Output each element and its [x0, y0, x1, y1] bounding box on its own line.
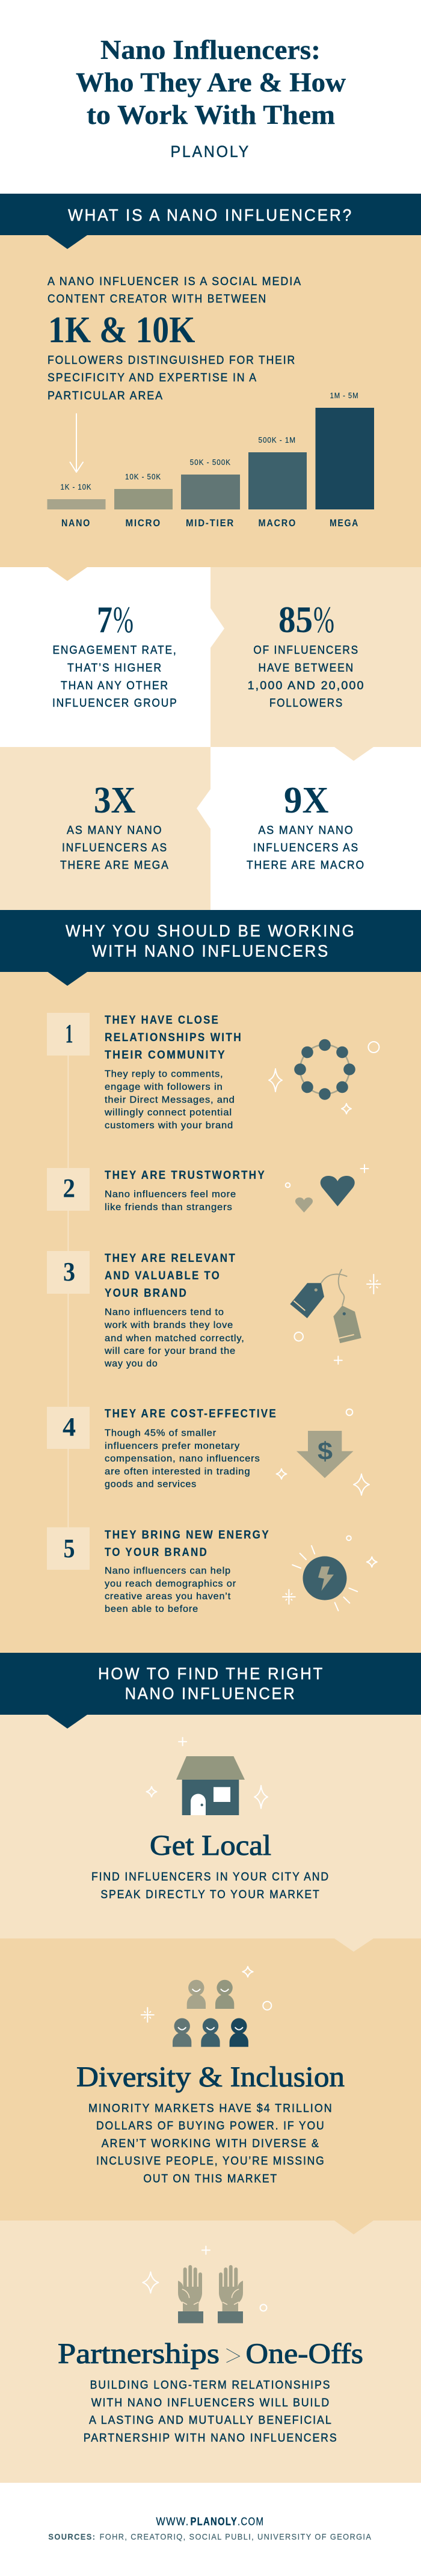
- pointer: tan notch into partnerships panel: [334, 2221, 373, 2234]
- bar chart: influencer tiers: NANO: [61, 517, 91, 529]
- item 3: relevant and valuable: will care for your brand the: [104, 1346, 236, 1356]
- stat: 7 percent: ENGAGEMENT RATE,: [53, 644, 177, 657]
- stat: 85 percent: [248, 600, 365, 710]
- stat: 9x: AS MANY NANO: [259, 824, 354, 837]
- stat: 85 percent: HAVE BETWEEN: [259, 662, 354, 674]
- get local text: [91, 1830, 330, 1901]
- stat: 7 percent: 7: [97, 600, 112, 641]
- bar chart: influencer tiers: 1M - 5M: [330, 392, 358, 400]
- diversity text: Diversity & Inclusion: [76, 2061, 345, 2093]
- stat: 7 percent: INFLUENCER GROUP: [52, 697, 178, 710]
- item 5: new energy: you reach demographics or: [105, 1579, 236, 1589]
- item 5: new energy: THEY BRING NEW ENERGY: [105, 1529, 270, 1542]
- title: Who They Are & How: [76, 67, 346, 97]
- item 5: new energy: Nano influencers can help: [105, 1566, 231, 1576]
- icon: community ring: [269, 1039, 379, 1114]
- definition text: 1K & 10K: [48, 310, 195, 351]
- item 1: close relationships: 1: [65, 1019, 73, 1048]
- item 5: new energy: [47, 1527, 270, 1614]
- icon: raised hands: [143, 2246, 267, 2323]
- bar chart: influencer tiers: 1K - 10K: [60, 483, 91, 491]
- arrow: pointing to nano bar: [70, 414, 83, 472]
- stat: 7 percent: [52, 600, 178, 710]
- brand name: PLANOLY: [171, 143, 250, 161]
- item 1: close relationships: customers with your brand: [105, 1120, 233, 1131]
- stat: 9x: [247, 780, 365, 872]
- icon: house: [147, 1738, 268, 1815]
- get local text: FIND INFLUENCERS IN YOUR CITY AND: [91, 1871, 330, 1884]
- item 3: relevant and valuable: [47, 1251, 245, 1369]
- item 4: cost-effective: 4: [63, 1412, 76, 1442]
- footer: website and sources: PLANOLY: [190, 2516, 238, 2528]
- partnerships text: BUILDING LONG-TERM RELATIONSHIPS: [90, 2379, 331, 2392]
- partnerships text: Partnerships: [58, 2338, 220, 2370]
- footer: website and sources: FOHR, CREATORIQ, SOCIAL PUBLI, UNIVERSITY OF GEORGIA: [100, 2531, 372, 2541]
- panel: 85 percent stat background: [210, 567, 421, 747]
- section banner: why you should be working: [0, 910, 421, 986]
- get local text: SPEAK DIRECTLY TO YOUR MARKET: [100, 1889, 321, 1901]
- item 1: close relationships: willingly connect potential: [104, 1108, 232, 1117]
- stat: 85 percent: 85: [278, 600, 313, 641]
- panel: 3x stat background: [0, 747, 210, 910]
- stat: 85 percent: OF INFLUENCERS: [253, 644, 359, 657]
- section banner: how to find: HOW TO FIND THE RIGHT: [98, 1664, 324, 1683]
- section banner: why you should be working: WHY YOU SHOULD BE WORKING: [66, 921, 356, 940]
- stat: 3x: 3X: [94, 780, 136, 821]
- pointer: white notch into 3x panel: [197, 789, 210, 829]
- stat: 3x: THERE ARE MEGA: [60, 859, 170, 872]
- bar chart: influencer tiers: 10K - 50K: [125, 473, 161, 481]
- item 4: cost-effective: are often interested in trading: [105, 1466, 250, 1477]
- item 1: close relationships: They reply to comments,: [105, 1069, 223, 1080]
- partnerships text: PARTNERSHIP WITH NANO INFLUENCERS: [84, 2432, 338, 2444]
- item 4: cost-effective: Though 45% of smaller: [105, 1428, 217, 1439]
- title: Nano Influencers:: [100, 35, 321, 65]
- stat: 9x: INFLUENCERS AS: [253, 842, 359, 855]
- definition text: PARTICULAR AREA: [48, 390, 164, 402]
- definition text: SPECIFICITY AND EXPERTISE IN A: [48, 372, 257, 384]
- item 5: new energy: been able to before: [105, 1604, 198, 1614]
- stat: 3x: INFLUENCERS AS: [62, 842, 168, 855]
- item 4: cost-effective: THEY ARE COST-EFFECTIVE: [105, 1407, 277, 1421]
- stat: 3x: [60, 780, 170, 872]
- stat: 7 percent: %: [113, 600, 134, 641]
- footer: website and sources: .COM: [238, 2516, 264, 2528]
- definition text: FOLLOWERS DISTINGUISHED FOR THEIR: [48, 354, 296, 367]
- definition text: [48, 275, 302, 402]
- item 5: new energy: creative areas you haven’t: [105, 1591, 231, 1602]
- stat: 9x: THERE ARE MACRO: [247, 859, 365, 872]
- item 3: relevant and valuable: YOUR BRAND: [105, 1287, 188, 1300]
- icon: group of people: [141, 1967, 271, 2047]
- item 4: cost-effective: [47, 1407, 277, 1489]
- stat: 85 percent: %: [313, 600, 334, 641]
- item 1: close relationships: THEIR COMMUNITY: [105, 1049, 226, 1062]
- pointer: light notch into 9x panel: [334, 747, 373, 761]
- bar chart: influencer tiers: MICRO: [125, 517, 161, 529]
- section banner: what is a nano influencer: WHAT IS A NANO INFLUENCER?: [68, 206, 353, 224]
- title: [76, 35, 346, 130]
- item 3: relevant and valuable: THEY ARE RELEVANT: [105, 1252, 236, 1265]
- stat: 9x: 9X: [284, 780, 329, 821]
- bar chart: influencer tiers: MEGA: [330, 517, 359, 529]
- stat: 85 percent: FOLLOWERS: [269, 697, 343, 710]
- item 3: relevant and valuable: Nano influencers tend to: [105, 1308, 224, 1318]
- get local text: Get Local: [150, 1830, 271, 1861]
- footer: website and sources: WWW.: [156, 2516, 189, 2528]
- item 1: close relationships: RELATIONSHIPS WITH: [105, 1031, 242, 1044]
- pointer: tan notch: [48, 567, 87, 581]
- stat: 3x: AS MANY NANO: [67, 824, 162, 837]
- icon: price tags: [290, 1269, 381, 1364]
- item 4: cost-effective: goods and services: [105, 1480, 197, 1489]
- item 5: new energy: TO YOUR BRAND: [105, 1546, 208, 1559]
- item 1: close relationships: [47, 1013, 242, 1131]
- pointer: white notch into 85 percent panel: [210, 608, 224, 648]
- footer: website and sources: [48, 2516, 372, 2541]
- item 2: trustworthy: 2: [63, 1173, 75, 1203]
- item 5: new energy: 5: [64, 1534, 75, 1563]
- item 2: trustworthy: like friends than strangers: [105, 1202, 233, 1213]
- icon: energy bolt: [283, 1536, 377, 1611]
- footer: website and sources: SOURCES:: [48, 2531, 96, 2541]
- item 1: close relationships: engage with followers in: [105, 1082, 223, 1092]
- stat: 7 percent: THAN ANY OTHER: [61, 680, 169, 692]
- section banner: why you should be working: WITH NANO INFLUENCERS: [92, 942, 330, 960]
- title: to Work With Them: [87, 100, 335, 130]
- item 4: cost-effective: compensation, nano influencers: [105, 1454, 260, 1464]
- bar chart: influencer tiers: MACRO: [259, 517, 297, 529]
- item 1: close relationships: their Direct Messages, and: [105, 1095, 235, 1105]
- item 3: relevant and valuable: 3: [63, 1257, 75, 1286]
- partnerships text: A LASTING AND MUTUALLY BENEFICIAL: [89, 2414, 333, 2427]
- diversity text: INCLUSIVE PEOPLE, YOU’RE MISSING: [96, 2155, 325, 2168]
- definition text: A NANO INFLUENCER IS A SOCIAL MEDIA: [48, 275, 302, 288]
- diversity text: DOLLARS OF BUYING POWER. IF YOU: [96, 2120, 325, 2133]
- item 1: close relationships: THEY HAVE CLOSE: [105, 1014, 220, 1027]
- diversity text: AREN’T WORKING WITH DIVERSE &: [102, 2138, 320, 2150]
- section banner: how to find: NANO INFLUENCER: [125, 1684, 296, 1703]
- panel: partnerships background: [0, 2221, 421, 2483]
- item 3: relevant and valuable: and when matched correctly,: [105, 1333, 245, 1344]
- bar chart: influencer tiers: [47, 392, 374, 529]
- panel: diversity background: [0, 1938, 421, 2221]
- bar chart: influencer tiers: MID-TIER: [186, 517, 235, 529]
- item 2: trustworthy: Nano influencers feel more: [105, 1190, 236, 1200]
- diversity text: OUT ON THIS MARKET: [143, 2172, 278, 2185]
- item 3: relevant and valuable: AND VALUABLE TO: [105, 1270, 221, 1282]
- bar chart: influencer tiers: 50K - 500K: [190, 458, 231, 467]
- section banner: how to find: [0, 1653, 421, 1729]
- diversity text: MINORITY MARKETS HAVE $4 TRILLION: [88, 2102, 333, 2115]
- partnerships text: One-Offs: [245, 2338, 363, 2370]
- bar chart: influencer tiers: 500K - 1M: [259, 436, 296, 444]
- panel: why work with nano influencers background: [0, 972, 421, 1653]
- pointer: light notch into diversity panel: [334, 1938, 373, 1952]
- panel: what is a nano influencer background: [0, 235, 421, 567]
- icon: down arrow with dollar: [277, 1409, 369, 1495]
- diversity text: [76, 2061, 345, 2185]
- item 4: cost-effective: influencers prefer monetary: [105, 1441, 240, 1451]
- partnerships text: [58, 2338, 363, 2444]
- panel: get local background: [0, 1715, 421, 1938]
- item 2: trustworthy: [47, 1168, 266, 1213]
- partnerships text: WITH NANO INFLUENCERS WILL BUILD: [91, 2397, 330, 2409]
- icon: hearts: [286, 1164, 368, 1213]
- timeline connector: [67, 1056, 69, 1528]
- stat: 7 percent: THAT’S HIGHER: [67, 662, 162, 674]
- item 3: relevant and valuable: work with brands they love: [104, 1320, 233, 1330]
- item 3: relevant and valuable: way you do: [104, 1359, 158, 1369]
- definition text: CONTENT CREATOR WITH BETWEEN: [48, 293, 267, 306]
- icon: down arrow with dollar: $: [318, 1437, 333, 1465]
- item 2: trustworthy: THEY ARE TRUSTWORTHY: [105, 1169, 266, 1182]
- stat: 85 percent: 1,000 AND 20,000: [248, 680, 365, 692]
- section banner: what is a nano influencer: [0, 194, 421, 249]
